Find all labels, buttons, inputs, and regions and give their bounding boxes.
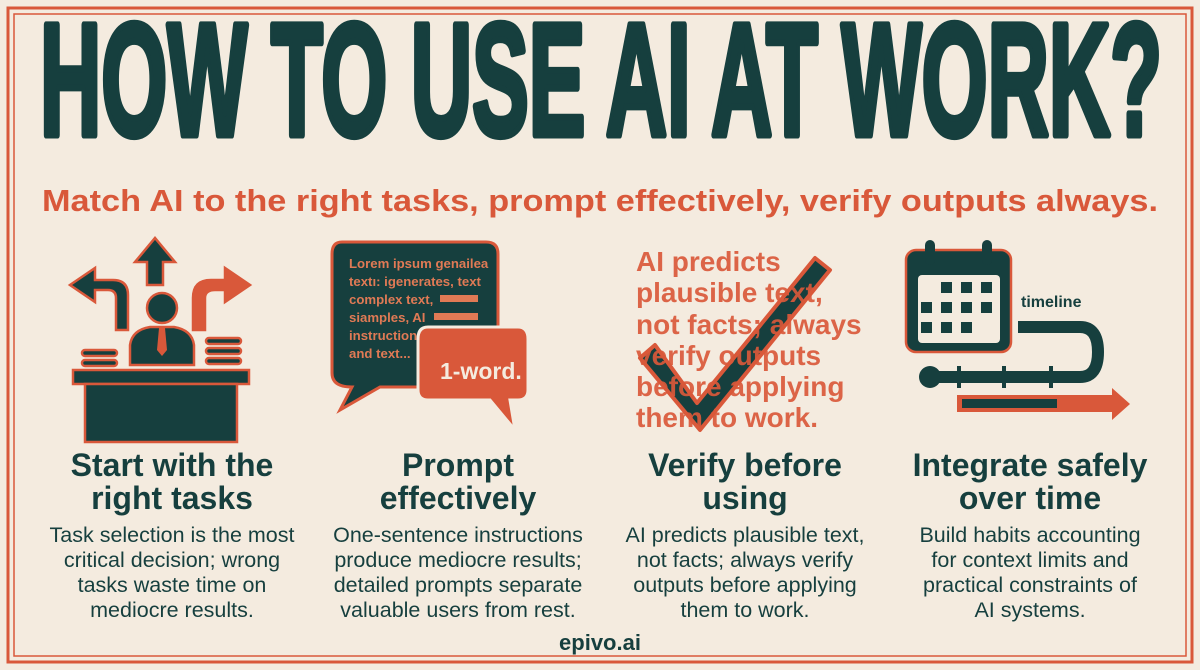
icon: speech bubbles: siamples, AI [349,310,425,325]
column 3: Verify before using: AI predicts plausible text, [625,523,865,547]
column 2: Prompt effectively: produce mediocre results; [334,548,582,572]
icon: checkmark with text: AI predicts [636,246,781,277]
column 3: Verify before using: them to work. [680,598,810,622]
column 1: Start with the right tasks: mediocre results. [90,598,254,622]
column 1: Start with the right tasks [50,447,295,622]
column 1: Start with the right tasks: Start with the [71,447,273,483]
column 4: Integrate safely over time: Integrate safely [913,447,1148,483]
column 1: Start with the right tasks: tasks waste time on [78,573,266,597]
column 4: Integrate safely over time: Build habits accounting [919,523,1141,547]
subtitle: Match AI to the right tasks, prompt effectively, verify outputs always. [42,183,1158,218]
column 4: Integrate safely over time: AI systems. [974,598,1086,622]
icon: speech bubbles: instruction [349,328,417,343]
icon: speech bubbles: 1-word. [440,358,522,384]
icon: desk with person and arrows [70,238,250,442]
column 4: Integrate safely over time [913,447,1148,622]
icon: speech bubbles: textı: igenerates, text [349,274,482,289]
column 3: Verify before using: Verify before [648,447,842,483]
icon: speech bubbles: Lorem ipsum genailea [349,256,489,271]
icon: speech bubbles [332,242,528,430]
icon: checkmark with text: verify outputs [636,340,821,371]
footer: epivo.ai [559,630,641,655]
icon: speech bubbles: complex text, [349,292,433,307]
column 4: Integrate safely over time: over time [959,480,1101,516]
icon: checkmark with text: them to work. [636,402,818,433]
icon: checkmark with text: before applying [636,371,844,402]
column 4: Integrate safely over time: practical constraints of [923,573,1137,597]
column 2: Prompt effectively: valuable users from rest. [340,598,576,622]
column 2: Prompt effectively: effectively [380,480,536,516]
column 3: Verify before using: outputs before applying [633,573,857,597]
column 1: Start with the right tasks: critical decision; wrong [64,548,280,572]
icon: calendar timeline [906,240,1130,420]
column 2: Prompt effectively: detailed prompts separate [334,573,582,597]
icon: checkmark with text [636,246,862,433]
column 2: Prompt effectively: One-sentence instructions [333,523,583,547]
column 2: Prompt effectively [333,447,583,622]
icon: checkmark with text: not facts; always [636,309,862,340]
column 1: Start with the right tasks: Task selection is the most [50,523,295,547]
column 1: Start with the right tasks: right tasks [91,480,253,516]
column 2: Prompt effectively: Prompt [402,447,514,483]
column 4: Integrate safely over time: for context limits and [931,548,1129,572]
icon: calendar timeline: timeline [1021,294,1082,311]
icon: checkmark with text: plausible text, [636,277,823,308]
icon: speech bubbles: and text... [349,346,411,361]
column 3: Verify before using: not facts; always verify [637,548,853,572]
column 3: Verify before using: using [702,480,788,516]
column 3: Verify before using [625,447,865,622]
